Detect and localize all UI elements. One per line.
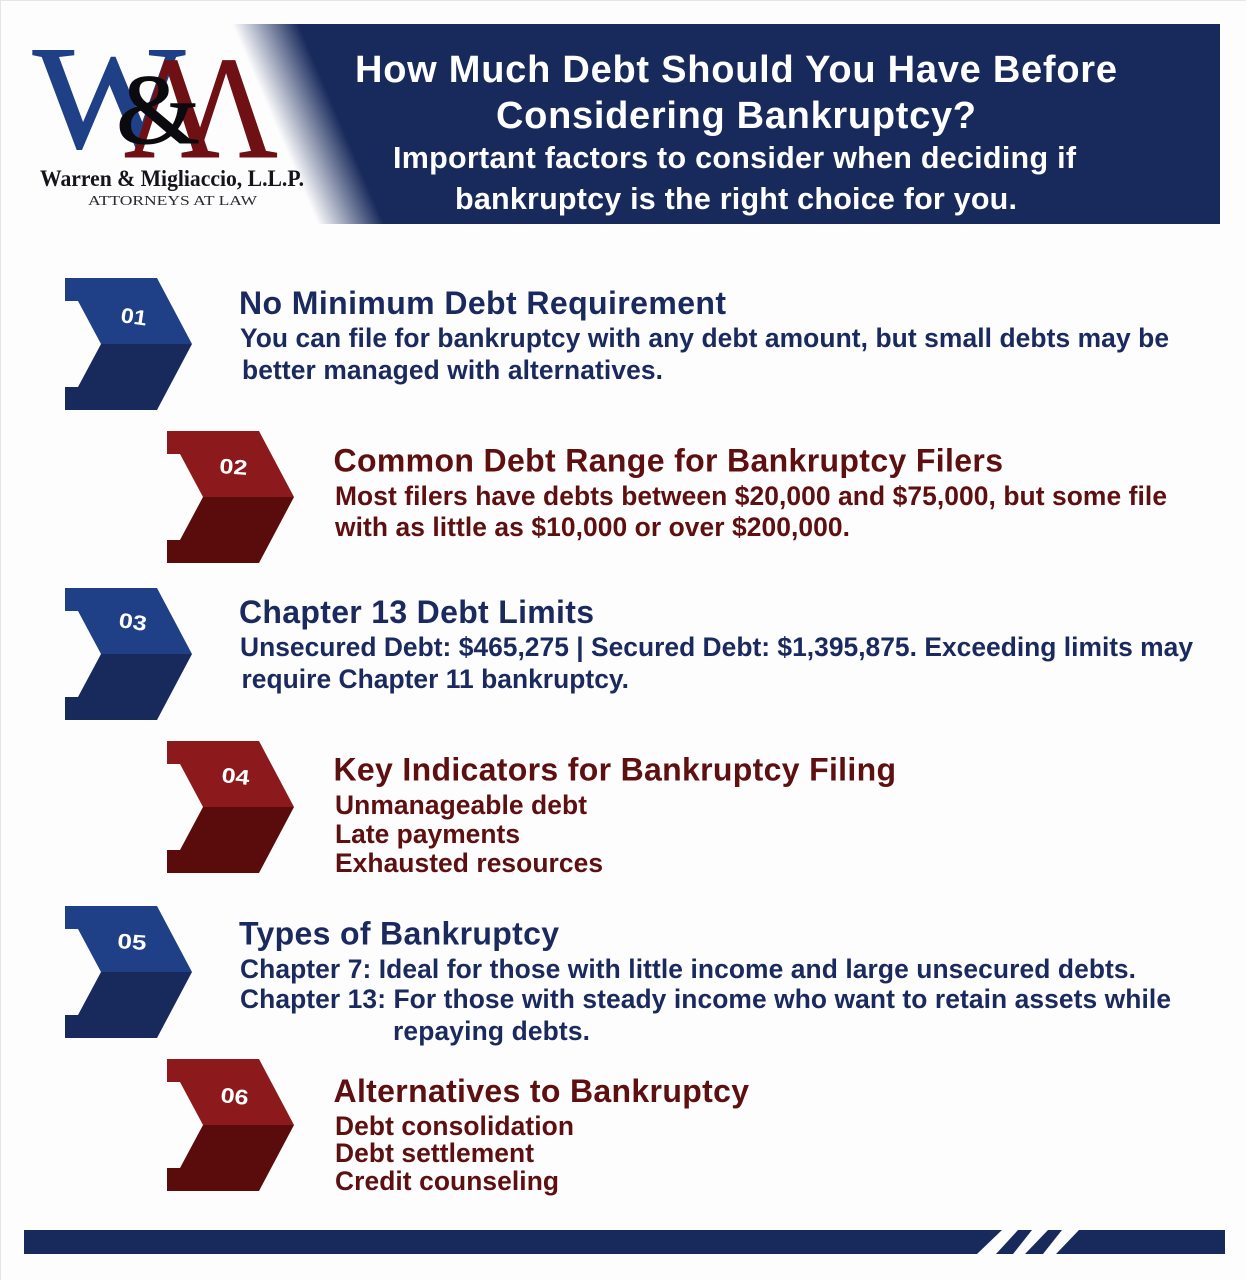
- icon: chevron 04: [167, 741, 294, 873]
- icon: chevron 01: 01: [119, 304, 149, 331]
- icon: chevron 01: [65, 278, 192, 410]
- item 05: [65, 906, 1171, 1046]
- text: Types of Bankruptcy: Chapter 7: Ideal for those with little income and large unsecured debts.: [240, 954, 1136, 984]
- item 06: [167, 1059, 749, 1196]
- text: Types of Bankruptcy: repaying debts.: [393, 1016, 590, 1046]
- text: Chapter 13 Debt Limits: require Chapter 11 bankruptcy.: [242, 664, 629, 694]
- icon: chevron 04: 04: [220, 764, 251, 790]
- header banner: [232, 24, 1220, 224]
- icon: chevron 06: [167, 1059, 294, 1191]
- logo: Warren & Migliaccio: Λ: [182, 27, 278, 189]
- item 01: [65, 278, 1169, 410]
- subtitle: [393, 141, 1077, 216]
- text: Alternatives to Bankruptcy: Debt consolidation: [335, 1111, 574, 1141]
- text: Types of Bankruptcy: Chapter 13: For those with steady income who want to retain assets while: [240, 984, 1171, 1014]
- text: Alternatives to Bankruptcy: Debt settlement: [335, 1138, 534, 1168]
- text: Alternatives to Bankruptcy: Credit counseling: [335, 1166, 559, 1196]
- text: Key Indicators: Key Indicators for Bankruptcy Filing: [334, 752, 896, 788]
- text: Alternatives to Bankruptcy: [334, 1073, 749, 1196]
- item 03: [65, 588, 1193, 720]
- subtitle: bankruptcy is the right choice for you.: [455, 182, 1017, 216]
- text: Common Debt Range: [334, 442, 1167, 542]
- icon: chevron 02: 02: [219, 455, 248, 480]
- item 04: [167, 741, 896, 878]
- text: Common Debt Range: Common Debt Range for Bankruptcy Filers: [334, 442, 1003, 478]
- text: Key Indicators: [334, 752, 896, 878]
- logo: Warren & Migliaccio: ATTORNEYS AT LAW: [88, 194, 258, 209]
- title: [355, 49, 1117, 137]
- logo: Warren & Migliaccio: Λ: [124, 27, 220, 189]
- icon: chevron 03: 03: [117, 609, 148, 636]
- text: Key Indicators: Unmanageable debt: [335, 790, 587, 820]
- icon: chevron 06: 06: [219, 1084, 250, 1110]
- logo: Warren & Migliaccio: W: [33, 16, 185, 179]
- text: Types of Bankruptcy: Types of Bankruptcy: [239, 916, 559, 952]
- text: Chapter 13 Debt Limits: [239, 594, 1193, 694]
- item 02: [167, 431, 1167, 563]
- footer bar: [24, 1230, 1225, 1254]
- text: Key Indicators: Late payments: [335, 819, 520, 849]
- logo: Warren & Migliaccio: Warren & Migliaccio, L.L.P.: [40, 166, 304, 191]
- text: Types of Bankruptcy: [239, 916, 1171, 1046]
- logo: Warren & Migliaccio: [33, 16, 304, 209]
- text: No Minimum Debt Requirement: No Minimum Debt Requirement: [239, 285, 726, 321]
- icon: chevron 03: [65, 588, 192, 720]
- text: No Minimum Debt Requirement: better managed with alternatives.: [242, 355, 663, 385]
- text: Common Debt Range: with as little as $10,000 or over $200,000.: [334, 512, 850, 542]
- text: Chapter 13 Debt Limits: Chapter 13 Debt Limits: [239, 594, 594, 630]
- title: How Much Debt Should You Have Before: [355, 49, 1117, 91]
- icon: chevron 05: [65, 906, 192, 1038]
- subtitle: Important factors to consider when deciding if: [393, 141, 1077, 175]
- text: Chapter 13 Debt Limits: Unsecured Debt: $465,275 | Secured Debt: $1,395,875. Exceeding limits may: [240, 632, 1193, 662]
- text: Key Indicators: Exhausted resources: [335, 848, 603, 878]
- title: Considering Bankruptcy?: [496, 95, 976, 137]
- text: No Minimum Debt Requirement: You can file for bankruptcy with any debt amount, but small debts may be: [240, 323, 1169, 353]
- text: Alternatives to Bankruptcy: Alternatives to Bankruptcy: [334, 1073, 749, 1109]
- icon: chevron 02: [167, 431, 294, 563]
- icon: chevron 05: 05: [117, 930, 148, 955]
- logo: Warren & Migliaccio: &: [116, 54, 200, 165]
- text: No Minimum Debt Requirement: [239, 285, 1169, 385]
- text: Common Debt Range: Most filers have debts between $20,000 and $75,000, but some file: [335, 481, 1167, 511]
